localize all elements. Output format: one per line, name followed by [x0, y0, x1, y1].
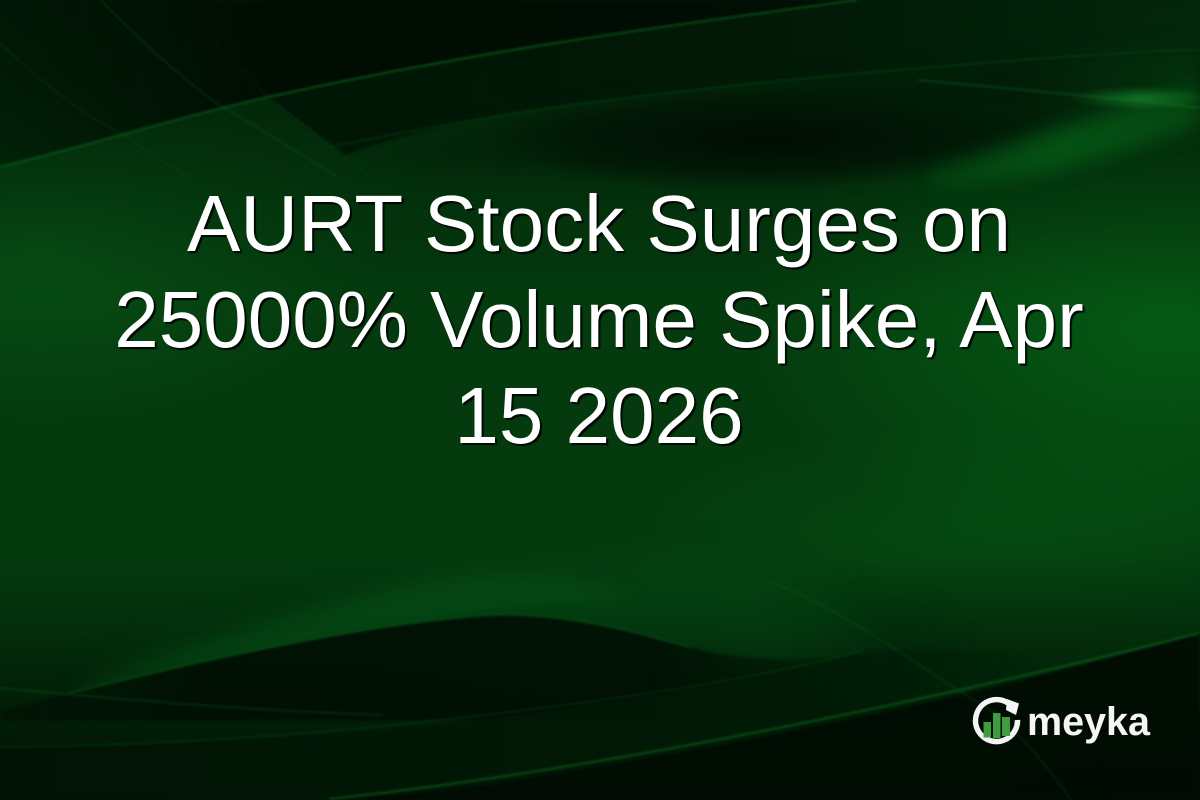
bottom bands [77, 569, 1000, 720]
wordmark: meyka [1027, 700, 1151, 744]
top bands [0, 0, 857, 167]
title: 15 2026 [454, 371, 744, 460]
logo: meyka [972, 696, 1151, 744]
icon: ring with bars [976, 699, 1019, 742]
title: AURT Stock Surges on [187, 179, 1011, 268]
title: 25000% Volume Spike, Apr [114, 275, 1084, 364]
title [114, 179, 1085, 460]
top right ribbon [930, 82, 1200, 190]
